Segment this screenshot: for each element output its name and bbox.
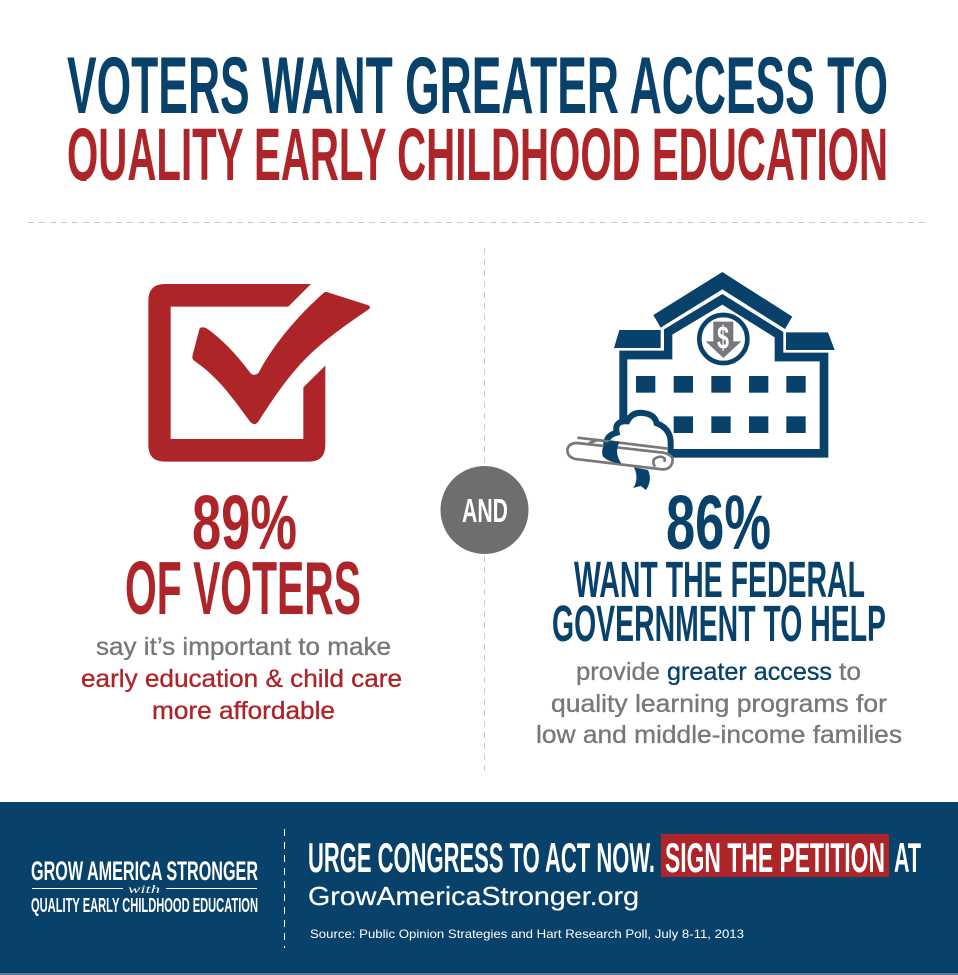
callout: urge Congress to act: URGE CONGRESS TO ACT NOW. (308, 834, 655, 881)
logo: Grow America Stronger: QUALITY EARLY CHILDHOOD EDUCATION (31, 895, 258, 917)
text block: greater access statement (536, 658, 902, 749)
callout: urge Congress to act: AT (894, 834, 921, 881)
heading: want the federal government to help (552, 551, 886, 652)
logo: Grow America Stronger: with (128, 882, 160, 896)
title (67, 56, 886, 181)
text block: affordability statement: say it’s important to make (96, 633, 391, 661)
icon: school building with dollar sign and diploma (560, 272, 835, 490)
statistic: 86%: 86% (666, 480, 771, 566)
badge: AND (440, 466, 528, 554)
text block: affordability statement: more affordable (152, 697, 335, 725)
panel: 89% of voters (81, 284, 402, 725)
text block: greater access statement: to (839, 658, 861, 686)
text block: greater access statement: low and middle-income families (536, 721, 902, 749)
heading: of voters: OF VOTERS (125, 546, 361, 630)
website link text: GrowAmericaStronger.org (308, 881, 639, 911)
text block: affordability statement: early education & child care (81, 665, 402, 693)
text block: greater access statement: quality learning programs for (551, 690, 887, 718)
panel: footer call to action (0, 802, 958, 975)
text block: greater access statement: provide (576, 658, 660, 686)
icon: school building with dollar sign and diploma: $ (717, 320, 729, 356)
logo: Grow America Stronger: GROW AMERICA STRONGER (31, 856, 258, 886)
text block: greater access statement: greater access (667, 658, 832, 686)
badge: AND: AND (462, 492, 508, 529)
text block: affordability statement (81, 633, 402, 725)
source note: Source: Public Opinion Strategies and Hart Research Poll, July 8-11, 2013 (310, 927, 744, 941)
logo: Grow America Stronger (31, 856, 258, 917)
statistic: 89%: 89% (192, 480, 297, 566)
panel: 86% want federal help (536, 272, 902, 749)
icon: red check mark in box (148, 284, 370, 462)
